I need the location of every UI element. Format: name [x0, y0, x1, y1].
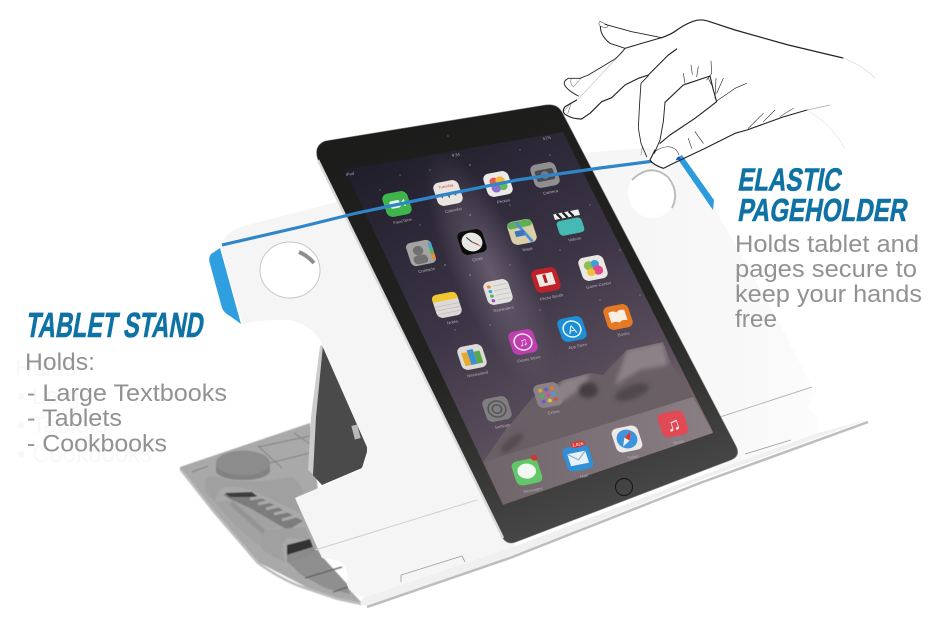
- app icon: Books: [602, 303, 637, 339]
- milky way: [401, 136, 579, 404]
- app icon: Reminders: [482, 278, 517, 314]
- app icon: Photos: Photos: [496, 197, 511, 205]
- app icon: App Store: [556, 315, 591, 351]
- text: elastic pageholder description: Holds tablet and: [735, 231, 919, 258]
- app icon: Reminders: Reminders: [493, 305, 514, 313]
- upper finger: [605, 24, 662, 38]
- app icon: Photos: [482, 170, 517, 206]
- app icon: Messages: Messages: [523, 486, 543, 494]
- app icon: Calendar: Tuesday: [437, 182, 454, 190]
- app icon: Game Center: [577, 254, 612, 290]
- app icon: Mail: [560, 440, 598, 481]
- app icon: Mail: 2,826: [571, 441, 585, 448]
- mountains: [483, 342, 693, 462]
- app icon: App Store: App Store: [567, 342, 588, 350]
- screen wallpaper: [345, 132, 713, 505]
- stand: silver bottom lip: [360, 420, 868, 607]
- stars: [380, 150, 640, 330]
- icon: left finger hole: [260, 242, 320, 298]
- text: elastic pageholder description: pages secure to: [735, 256, 917, 283]
- stand: back right panel: [583, 148, 818, 472]
- top of hand: [662, 20, 843, 58]
- stand: dark support: [308, 345, 367, 485]
- heading: tablet stand: TABLET STAND: [24, 306, 207, 345]
- app icon: Settings: [481, 395, 516, 431]
- tablet: [317, 105, 738, 543]
- app icon: Safari: Safari: [627, 454, 639, 460]
- app icon: Extras folder: [532, 381, 567, 417]
- app icon: Books: Books: [617, 331, 630, 337]
- stand: blue right edge: [677, 155, 714, 210]
- text: tablet stand list: - Large Textbooks: [27, 380, 227, 407]
- base rim: [181, 470, 362, 604]
- app icon: Mail: Mail: [579, 473, 589, 479]
- recessed lower area: [288, 552, 350, 594]
- ghost text left: • Large: [17, 383, 93, 410]
- app icon: Safari: [610, 424, 647, 462]
- app icon: Camera: [529, 161, 564, 197]
- app icon: Photo Booth: Photo Booth: [539, 292, 564, 302]
- app icon: iTunes Store: [507, 328, 542, 364]
- app icon: Notes: Notes: [446, 319, 459, 325]
- app icon: Maps: Maps: [522, 246, 533, 252]
- index finger: [638, 76, 648, 157]
- app icon: FaceTime: FaceTime: [393, 217, 413, 225]
- strap upper: [205, 476, 304, 514]
- app icon: Camera: Camera: [542, 188, 559, 196]
- ghost text left: [15, 355, 152, 468]
- app icon: iTunes Store: iTunes Store: [516, 354, 542, 364]
- dock: [483, 397, 713, 504]
- tablet silver edge: [318, 160, 503, 538]
- app icon: Videos: Videos: [567, 235, 582, 243]
- app icon: App Store: A: [566, 322, 578, 337]
- text: tablet stand list: - Tablets: [27, 405, 122, 432]
- status bar: 9:34: [451, 152, 461, 158]
- app icon: FaceTime: [381, 190, 416, 226]
- lower deck with embossed brand: [215, 497, 300, 545]
- text: elastic pageholder description: [735, 231, 922, 333]
- knob: [216, 450, 270, 480]
- app icon: Videos: [553, 209, 588, 244]
- app icon: Calendar: Calendar: [444, 206, 463, 214]
- tablet body: [317, 105, 738, 543]
- app icon: Notes: [431, 291, 466, 327]
- app icon: Contacts: [405, 239, 440, 275]
- app icon: Settings: Settings: [494, 422, 511, 430]
- app icon: Messages: [509, 454, 548, 495]
- heading: elastic pageholder: ELASTIC: [736, 162, 845, 197]
- thumb fill: [650, 147, 679, 168]
- ring finger: [563, 49, 677, 119]
- text: tablet stand list: [25, 349, 227, 458]
- app icon: Maps: [506, 218, 541, 254]
- elastic band dark end: [668, 158, 680, 160]
- knuckle creases: [683, 61, 735, 101]
- ghost text left: Holds:: [15, 355, 83, 382]
- text: tablet stand list: Holds:: [25, 349, 95, 376]
- app icon: iTunes Store: ♫: [516, 335, 530, 349]
- text: elastic pageholder description: free: [735, 306, 777, 333]
- stand: blue left edge: [209, 248, 241, 324]
- status bar: iPad: [345, 170, 355, 177]
- status bar: [345, 135, 552, 177]
- stand: white front panel: [220, 200, 520, 597]
- app icon: Music: ♫: [663, 414, 684, 436]
- app icon: Game Center: Game Center: [585, 280, 612, 290]
- thumb: [650, 110, 807, 168]
- app icon: Extras folder: Extras: [547, 409, 560, 416]
- app icon: Music: [656, 409, 693, 447]
- app icon: Contacts: Contacts: [418, 266, 436, 274]
- icon: right finger hole: [628, 168, 676, 218]
- app icon: Clock: [456, 228, 491, 264]
- home button: [616, 478, 632, 496]
- status bar: 51%: [542, 135, 552, 141]
- ghost text left: • Cookbooks: [17, 441, 152, 468]
- app icon: Newsstand: [456, 343, 491, 379]
- app icon: Music: Music: [673, 439, 685, 445]
- app icon: Calendar: [432, 179, 467, 215]
- illustration: hand pinching elastic: [563, 20, 875, 168]
- heading: elastic pageholder: [736, 162, 911, 228]
- ghost text left: • Tablets: [17, 412, 108, 439]
- app icon: Photo Booth: [530, 266, 565, 302]
- app icon: Clock: Clock: [472, 255, 484, 262]
- stand: grey base: [180, 423, 362, 604]
- slot: [287, 539, 318, 563]
- text: elastic pageholder description: keep your hands: [735, 281, 922, 308]
- elastic band: [222, 161, 654, 245]
- strap lower: [260, 527, 310, 562]
- text: tablet stand list: - Cookbooks: [27, 430, 167, 458]
- camera dot: [447, 135, 449, 137]
- middle finger: [564, 48, 625, 96]
- base plate: [180, 423, 362, 603]
- app icon: Newsstand: Newsstand: [466, 369, 489, 378]
- ribs: [223, 492, 303, 530]
